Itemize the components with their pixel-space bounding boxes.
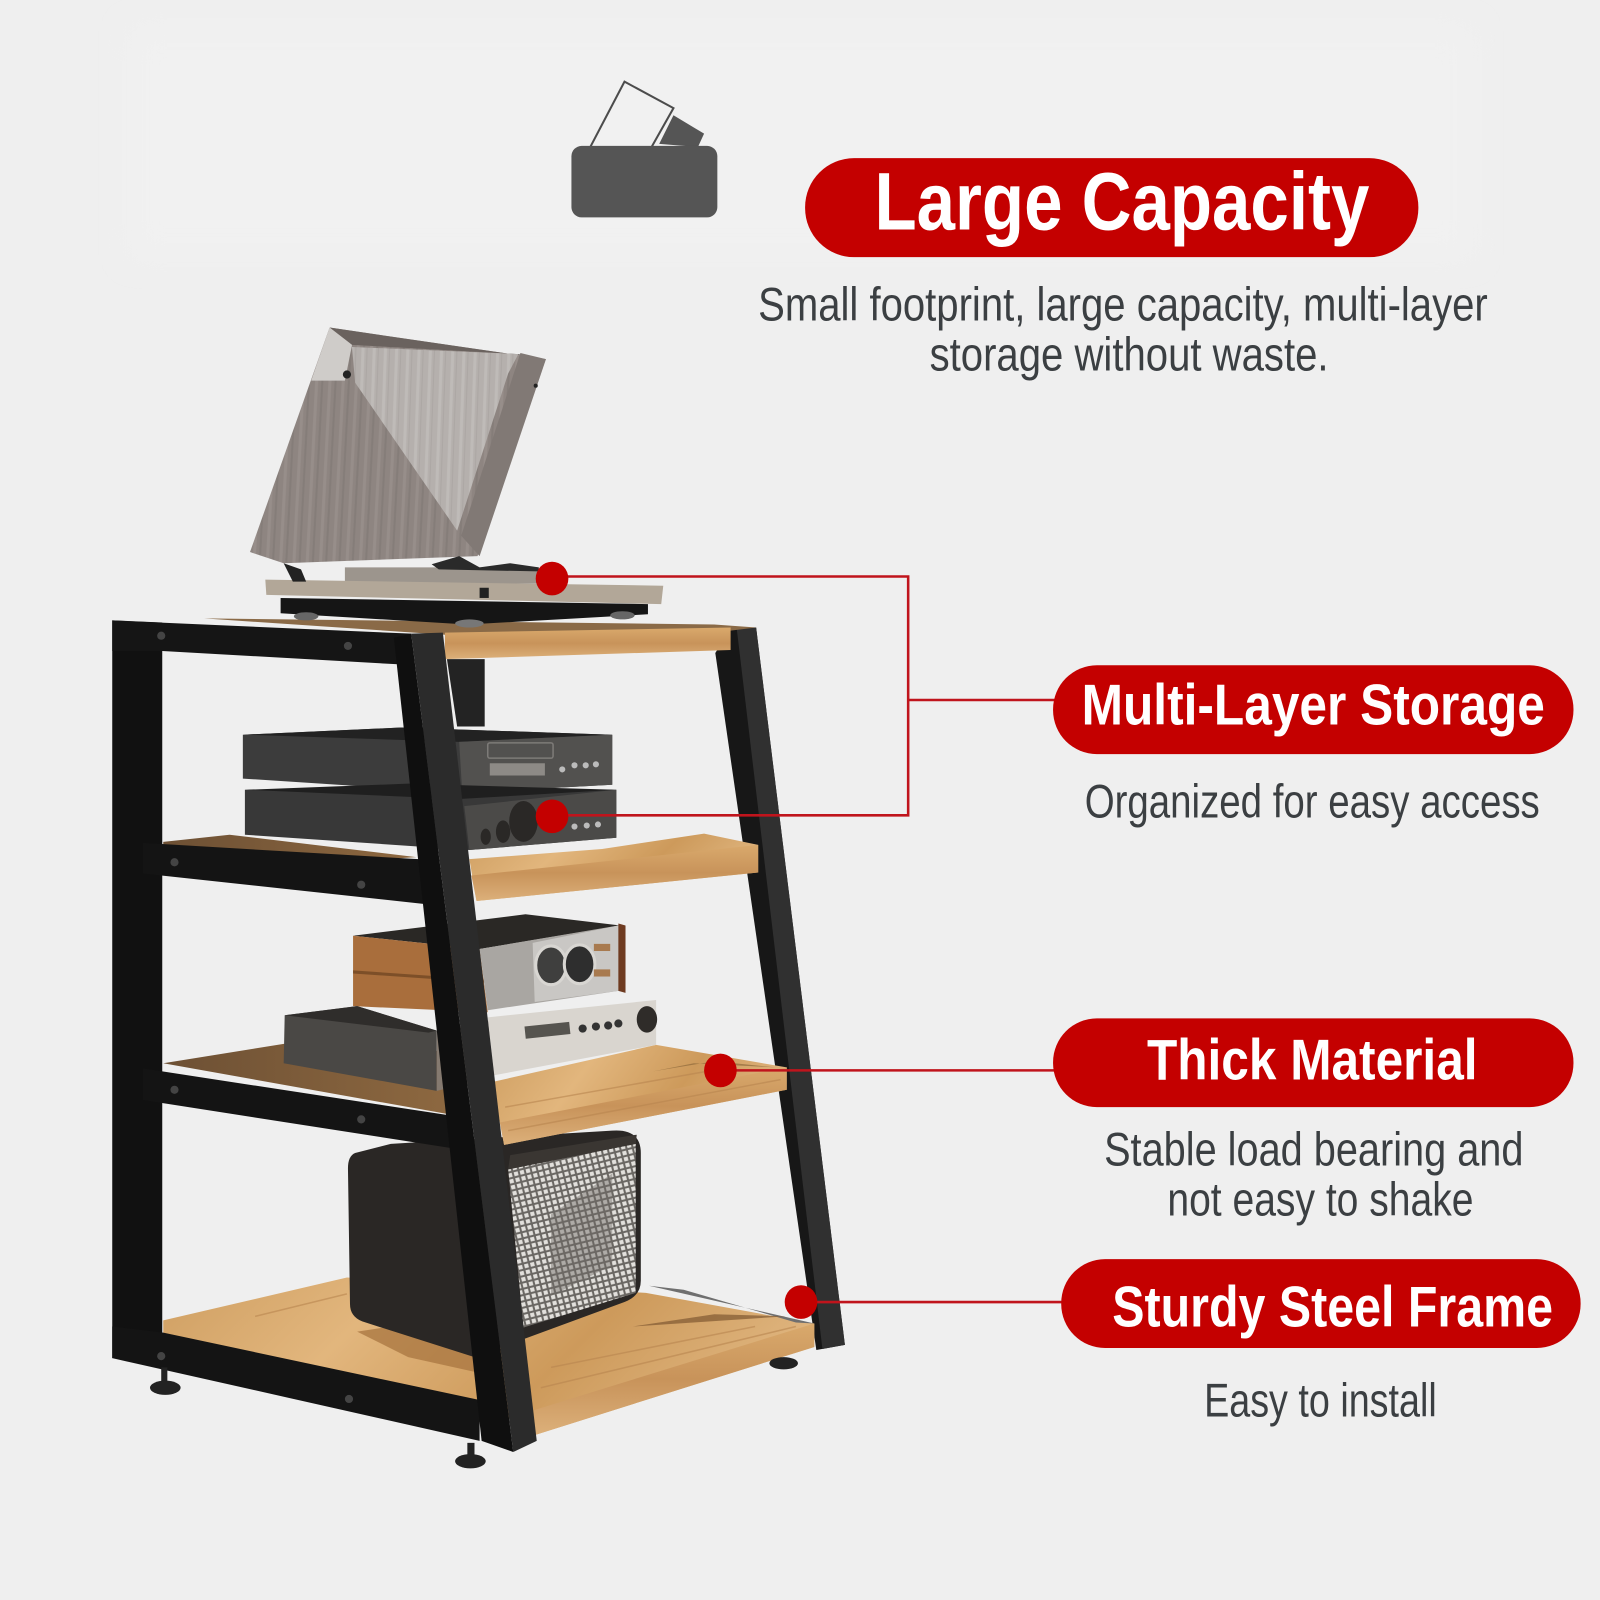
product: audio rack with components [112, 328, 845, 1468]
pill: Thick Material: Thick Material [1147, 1029, 1478, 1093]
connector: shelf to Thick Material [704, 1054, 1055, 1087]
bottom shelf [163, 1278, 814, 1435]
front leg [394, 633, 537, 1452]
foot right [769, 1357, 798, 1369]
text: thick material description [1104, 1123, 1523, 1225]
text: large capacity description [758, 278, 1488, 380]
amplifier lower [245, 784, 616, 850]
back post [447, 659, 485, 727]
text: thick material description: Stable load bearing and [1104, 1123, 1523, 1175]
left post [112, 620, 162, 1358]
right leg [715, 628, 845, 1350]
top rail [112, 620, 411, 664]
pill: Sturdy Steel Frame [1061, 1259, 1581, 1348]
text: large capacity description: Small footprint, large capacity, multi-layer [758, 278, 1488, 330]
feet [150, 1367, 486, 1468]
rail 2 [143, 1068, 457, 1149]
unit 3: wood box tuner [353, 914, 626, 1012]
speaker [348, 1130, 641, 1357]
text: steel frame description: Easy to install [1204, 1374, 1437, 1426]
pill: Multi-Layer Storage [1053, 665, 1573, 754]
bottom rail [112, 1327, 480, 1441]
bolts [157, 632, 365, 1403]
shelf 2 [163, 834, 758, 901]
connector: frame to Sturdy Steel Frame [785, 1285, 1063, 1319]
connector: top dots to Multi-Layer Storage [536, 562, 1055, 833]
pill: Multi-Layer Storage: Multi-Layer Storage [1082, 673, 1545, 737]
shelf 3 [163, 1044, 787, 1145]
turntable [265, 556, 663, 628]
icon: storage bag [571, 82, 717, 217]
text: thick material description: not easy to shake [1167, 1173, 1473, 1225]
amplifier upper [243, 728, 612, 793]
text: large capacity description: storage without waste. [930, 328, 1329, 380]
pill: Large Capacity: Large Capacity [874, 157, 1369, 248]
rail 1 [143, 843, 426, 904]
unit 4: receiver [284, 1000, 657, 1091]
pill: Thick Material [1053, 1018, 1573, 1107]
turntable lid [250, 328, 546, 563]
top shelf [204, 618, 756, 659]
